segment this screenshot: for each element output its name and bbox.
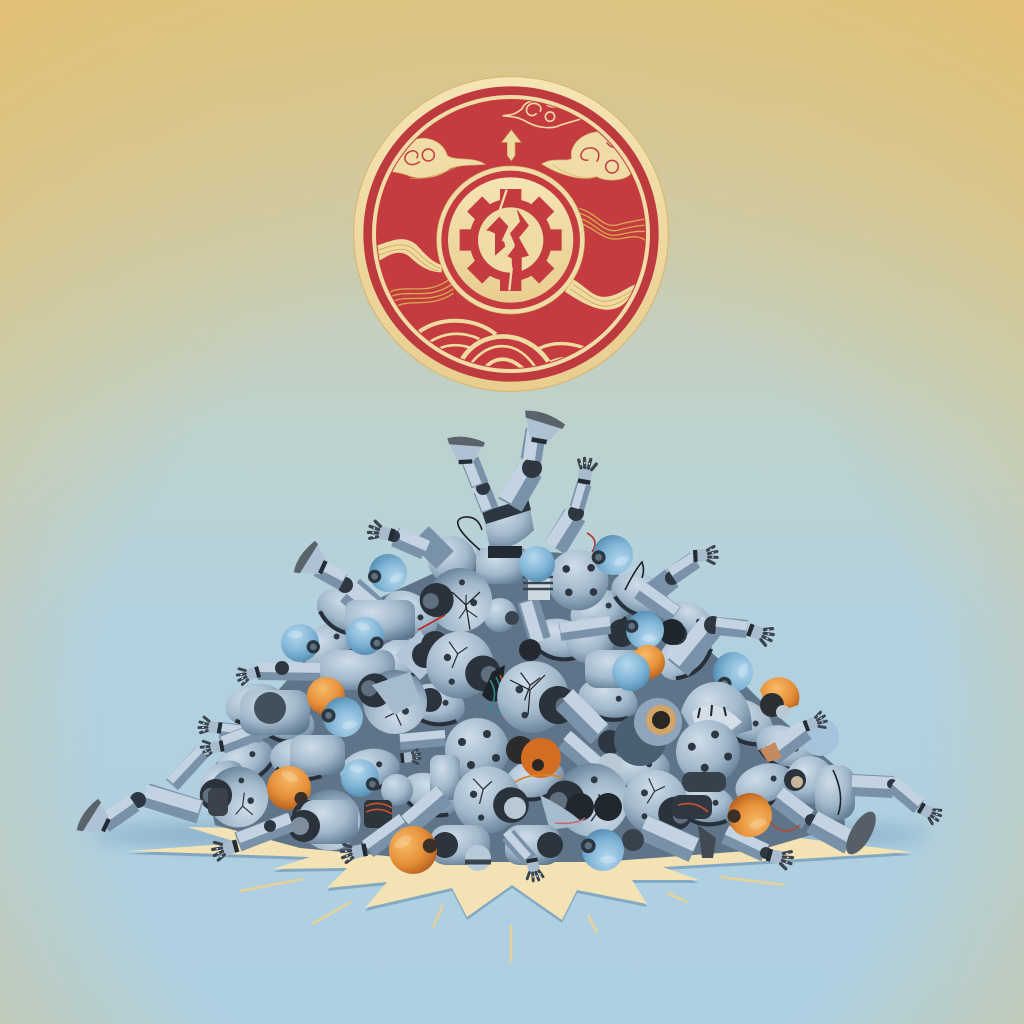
orange and blue heads: lower left [76, 756, 383, 841]
robot torso: right dome [671, 682, 752, 792]
seigaiha arcs at the bottom [419, 321, 585, 370]
crack through the gear [499, 190, 513, 290]
robot body and leg: far right [815, 765, 943, 825]
robot torso: lower centre [540, 757, 635, 844]
wave: left gold band [373, 239, 442, 272]
blue head: bottom [581, 829, 624, 871]
orange head: centre [506, 736, 565, 782]
robot arm: right upper [625, 546, 718, 615]
red ring and field [363, 86, 659, 382]
robot torso: bottom centre [430, 825, 563, 882]
robot arm: top right raised [550, 457, 597, 552]
wave: right upper thin lines [579, 208, 647, 242]
robot legs: upside down at the summit [447, 409, 567, 550]
cracked shell heads: upper [346, 563, 507, 743]
robot eye: tan lens [614, 698, 682, 766]
robot arm: right reaching [665, 616, 775, 668]
robot torso and arm: lower left [211, 790, 392, 861]
wave: left lower thin lines [389, 279, 453, 307]
medallion: red and gold emblem [354, 77, 668, 391]
robot torso: centre front [340, 765, 530, 863]
robot leg: upper left raised [293, 538, 395, 630]
robot pile [76, 409, 943, 883]
orange and blue heads: middle [307, 645, 759, 740]
robot parts: upper right cluster [483, 543, 685, 688]
robot limbs: lower right [622, 822, 794, 870]
robot torso: centre right [493, 657, 622, 777]
robot torso: right front [614, 761, 712, 846]
small limbs: centre [381, 734, 460, 806]
orange head: bottom [380, 817, 446, 883]
ground shadow [90, 819, 930, 851]
central ring and gear [437, 166, 585, 314]
robot leg: lower right [778, 792, 882, 859]
cloud: top outline [503, 100, 581, 128]
decorations clipped to the field [373, 100, 647, 370]
arrow: broken up arrow [486, 209, 529, 282]
orange head: lower right [722, 787, 800, 843]
robot parts: upper left cluster [240, 600, 442, 775]
robot arms: left side [170, 661, 330, 785]
robot arm: top left raised [367, 520, 445, 560]
centre head with dots [445, 718, 509, 782]
robot head and arm: right [760, 677, 839, 804]
arrow: up [502, 130, 521, 161]
gear: broken cog [460, 189, 562, 291]
starburst: cracked floor [128, 810, 912, 923]
wave: right gold band [565, 278, 638, 310]
blue robot heads: upper [281, 528, 664, 662]
splinters around the burst [240, 877, 785, 962]
filler plates across the pile [193, 563, 821, 831]
pile base silhouette [205, 550, 845, 862]
outer gold rim [354, 77, 668, 391]
cloud: left [392, 138, 485, 179]
robot torso: summit [428, 498, 534, 584]
cloud: right [542, 132, 632, 180]
